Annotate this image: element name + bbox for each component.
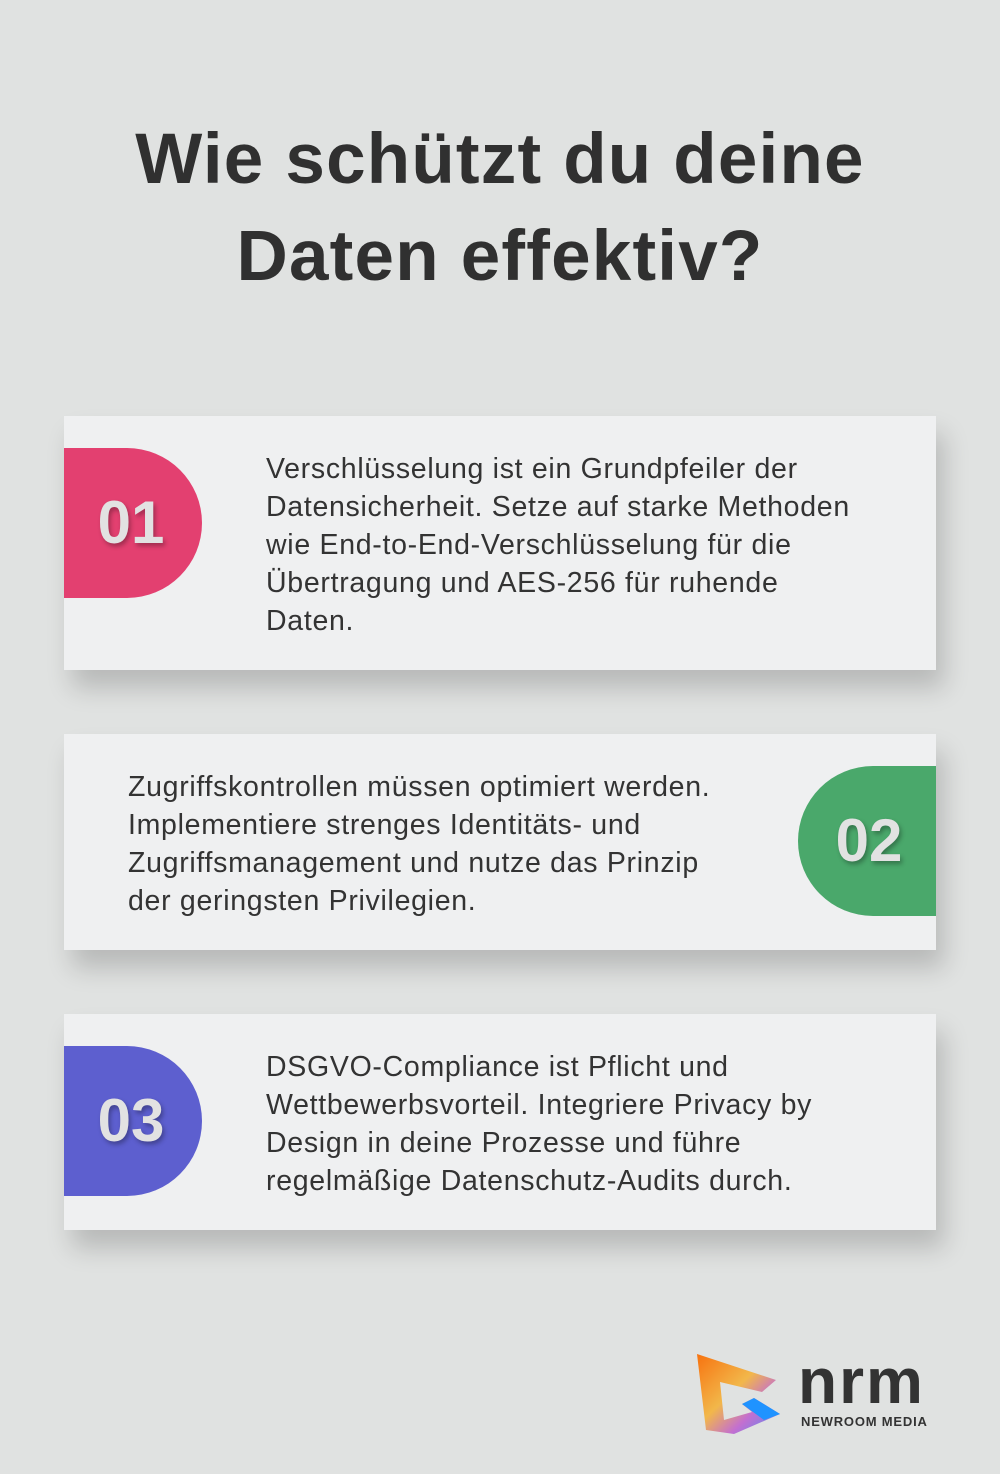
- text 02: [128, 771, 710, 917]
- text 02: Zugriffskontrollen müssen optimiert werden.: [128, 771, 710, 803]
- badge 03: [64, 1046, 202, 1196]
- text 03: DSGVO-Compliance ist Pflicht und: [266, 1051, 729, 1083]
- text 01: Übertragung und AES-256 für ruhende: [266, 567, 779, 599]
- text 02: Zugriffsmanagement und nutze das Prinzip: [128, 847, 699, 879]
- text 02: Implementiere strenges Identitäts- und: [128, 809, 641, 841]
- text 01: Datensicherheit. Setze auf starke Methoden: [266, 491, 850, 523]
- text 01: Verschlüsselung ist ein Grundpfeiler der: [266, 453, 798, 485]
- badge 01: 01: [98, 489, 164, 556]
- title: Daten effektiv?: [237, 217, 763, 296]
- badge 01: [64, 448, 202, 598]
- title: [135, 120, 865, 296]
- panel: step 01: [64, 416, 936, 670]
- logo text: nrm: [798, 1345, 925, 1417]
- badge 02: [798, 766, 936, 916]
- text 03: Wettbewerbsvorteil. Integriere Privacy by: [266, 1089, 812, 1121]
- text 02: der geringsten Privilegien.: [128, 885, 476, 917]
- logo icon: [697, 1354, 780, 1434]
- badge 02: 02: [836, 807, 902, 874]
- text 01: Daten.: [266, 605, 354, 637]
- title: Wie schützt du deine: [135, 120, 865, 199]
- text 03: regelmäßige Datenschutz-Audits durch.: [266, 1165, 792, 1197]
- panel: step 02: [64, 734, 936, 950]
- badge 03: 03: [98, 1087, 164, 1154]
- text 03: Design in deine Prozesse und führe: [266, 1127, 741, 1159]
- panel: step 03: [64, 1014, 936, 1230]
- logo: NEWROOM MEDIA: [801, 1414, 928, 1429]
- logo: [697, 1345, 928, 1434]
- text 01: wie End-to-End-Verschlüsselung für die: [266, 529, 792, 561]
- text 01: [266, 453, 850, 637]
- text 03: [266, 1051, 812, 1197]
